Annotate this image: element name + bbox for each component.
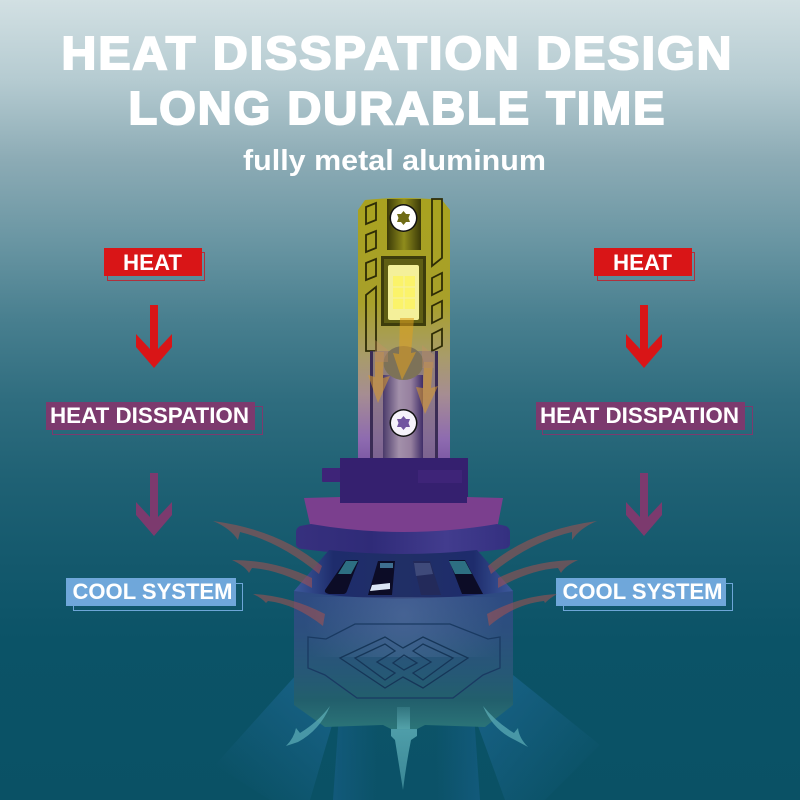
- subtitle: fully metal aluminum: [243, 145, 546, 177]
- right cooling arrow: [483, 706, 528, 747]
- title: HEAT DISSPATION DESIGN: [62, 27, 734, 79]
- top screw: [390, 204, 418, 232]
- label: cool system right: COOL SYSTEM: [562, 579, 722, 604]
- top screw socket: [387, 199, 421, 250]
- cooling arrows: [286, 706, 528, 790]
- led bulb: [294, 198, 513, 729]
- blue disk: [296, 524, 510, 556]
- center cooling arrow: [391, 707, 417, 790]
- curved heat arrows left: [213, 521, 325, 626]
- label: cool system: [66, 578, 242, 610]
- right vent slots: [432, 199, 442, 351]
- heat sink body: [294, 550, 513, 729]
- arrow: heat to dissipation: [136, 305, 172, 368]
- label: heat dissipation: [46, 402, 262, 434]
- bulb collar: [322, 458, 468, 504]
- magenta flange: [304, 497, 503, 534]
- label: heat: HEAT: [123, 250, 183, 275]
- label: heat dissipation: HEAT DISSPATION: [50, 403, 249, 428]
- heat flow arrows inside bulb: [368, 318, 438, 414]
- body cylinder: [294, 591, 513, 729]
- right flow column: [536, 248, 752, 610]
- body shoulder: [294, 550, 513, 600]
- bottom screw: [390, 409, 418, 437]
- label: heat dissipation right: [536, 402, 752, 434]
- title: [62, 27, 734, 134]
- label: heat: [104, 248, 204, 280]
- led window: [381, 256, 426, 326]
- arrow: heat to dissipation right: [626, 305, 662, 368]
- label: heat right: HEAT: [613, 250, 673, 275]
- label: cool system: COOL SYSTEM: [72, 579, 233, 604]
- embossed diamond logo: [340, 637, 468, 688]
- cooling slots: [325, 560, 483, 595]
- arrow: dissipation to cool right: [626, 473, 662, 536]
- left vent slots: [366, 203, 376, 351]
- body top band highlight: [294, 597, 513, 657]
- curved heat arrows right: [487, 521, 597, 626]
- label: heat dissipation right: HEAT DISSPATION: [540, 403, 739, 428]
- embossed panel: [308, 624, 500, 698]
- bulb upper shaft: [358, 198, 450, 458]
- title: LONG DURABLE TIME: [128, 82, 666, 134]
- arrow: dissipation to cool: [136, 473, 172, 536]
- label: cool system right: [556, 578, 732, 610]
- cooling light beams: [215, 675, 600, 800]
- lower channel: [370, 346, 438, 458]
- left flow column: [46, 248, 262, 610]
- left cooling arrow: [286, 706, 330, 746]
- label: heat right: [594, 248, 694, 280]
